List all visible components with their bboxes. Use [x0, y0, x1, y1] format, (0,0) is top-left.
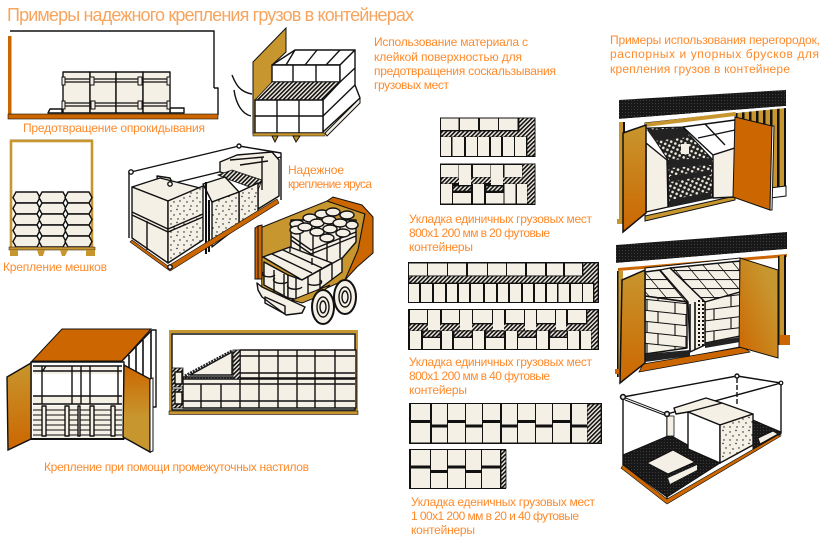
text: partitions and braces: крепления грузов в контейнере: [610, 62, 790, 76]
plan: 800x1200 in 20ft, layout A: [440, 118, 536, 157]
caption: 40 ft containers: [409, 355, 592, 397]
plan: 1000x1200 in 20ft: [409, 449, 506, 489]
caption: 1000x1200 layout: [411, 495, 596, 537]
text: adhesive material: предотвращения соскальзывания: [374, 64, 556, 78]
text: reliable tier fastening: Надежное: [288, 163, 344, 177]
truck frame: [257, 283, 305, 315]
caption: 1000x1200 layout: контейнеры: [411, 523, 475, 537]
panel: side view with intermediate deck: [169, 332, 358, 414]
caption: 20 ft containers: контейнеры: [409, 240, 473, 254]
panel: adhesive material stack: [232, 28, 360, 142]
caption: 20 ft containers: [409, 212, 592, 254]
caption: 1000x1200 layout: 1 00х1 200 мм в 20 и 40 футовые: [411, 509, 579, 523]
front cargo: [157, 176, 172, 185]
wheels: [312, 280, 356, 324]
text: reliable tier fastening: [288, 163, 372, 191]
text: adhesive material: грузовых мест: [374, 78, 450, 92]
text: partitions and braces: [610, 33, 820, 76]
text: adhesive material: клейкой поверхностью для: [374, 50, 522, 64]
panel: open frame container with block cargo: [621, 374, 783, 504]
caption: 20 ft containers: 800х1 200 мм в 20 футовые: [409, 226, 550, 240]
caption: intermediate decks: Крепление при помощи промежуточных настилов: [44, 460, 309, 474]
plan: 800x1200 in 40ft, layout A: [408, 262, 599, 303]
text: adhesive material: [374, 35, 556, 92]
caption: 20 ft containers: Укладка единичных грузовых мест: [409, 212, 592, 226]
caption: overturn prevention: Предотвращение опрокидывания: [23, 121, 205, 135]
text: partitions and braces: Примеры использования перегородок,: [610, 33, 820, 47]
title: Примеры надежного крепления грузов в контейнерах: [7, 5, 414, 25]
caption: 40 ft containers: 800х1 200 мм в 40 футовые: [409, 369, 550, 383]
text: partitions and braces: распорных и упорных брусков для: [610, 47, 819, 61]
plan: 800x1200 in 40ft, layout B: [408, 309, 599, 350]
lower drums: [264, 262, 288, 298]
panel: doors open with intermediate decks: [7, 329, 156, 452]
panel: drums on truck: [255, 197, 373, 324]
plan: 800x1200 in 20ft, layout B: [440, 164, 536, 205]
panel: container with partition mesh: [617, 90, 786, 232]
caption: 40 ft containers: контейеры: [409, 383, 467, 397]
far cargo: [220, 152, 279, 209]
caption: 40 ft containers: Укладка единичных грузовых мест: [409, 355, 592, 369]
plan: 1000x1200 in 40ft: [409, 403, 602, 444]
caption: bag fastening: Крепление мешков: [3, 260, 107, 274]
caption: 1000x1200 layout: Укладка еденичных грузовых мест: [411, 495, 596, 509]
icon: arrows to adhesive layer: [232, 75, 252, 116]
panel: overturn prevention: [8, 31, 218, 119]
text: reliable tier fastening: крепление яруса: [288, 177, 372, 191]
panel: bag fastening: [9, 140, 95, 256]
panel: container with bricks and partition: [615, 232, 790, 383]
pallet deck: [263, 247, 332, 280]
upper drums: [290, 208, 358, 268]
panel: container with reliable tier fastening: [129, 144, 281, 271]
text: adhesive material: Использование материала с: [374, 35, 528, 49]
